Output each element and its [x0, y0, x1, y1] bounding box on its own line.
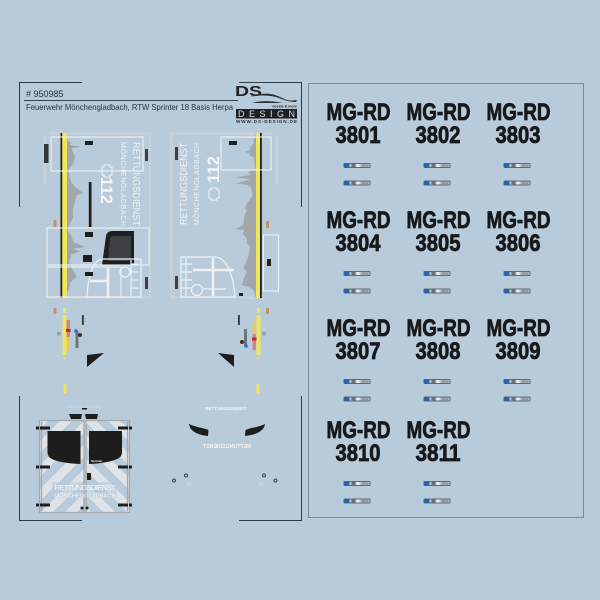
left body outline [45, 134, 150, 298]
left coat of arms [87, 259, 141, 297]
crop marks [20, 82, 302, 520]
rear doors decal [36, 405, 132, 512]
door frame [40, 420, 130, 512]
left black line [60, 133, 62, 298]
small rings [172, 474, 277, 486]
left headlight [189, 424, 208, 436]
right body outline [171, 134, 272, 298]
right side emergency number: 112 [204, 156, 223, 183]
left side emergency number: 112 [97, 177, 116, 204]
rear model badge: Sprinter [91, 459, 103, 463]
plate set 3804: 3804 [336, 230, 381, 257]
rear text: Rettungsdienst: RETTUNGSDIENST [54, 483, 116, 492]
logo url: WWW.DS-DESIGN.DE [236, 119, 297, 124]
plate set 3802: 3802 [416, 122, 460, 149]
plate set 3811: MG-RD [406, 417, 470, 444]
left orange marker [54, 220, 56, 227]
plate set 3807: 3807 [336, 338, 380, 365]
plate set 3808: 3808 [416, 338, 460, 365]
left door chevrons [40, 421, 84, 512]
text backing band [52, 482, 117, 498]
article number: # 950985 [26, 89, 64, 99]
plate set 3802: MG-RD [406, 99, 470, 126]
left black bar [82, 315, 84, 325]
right black bar [238, 315, 240, 325]
plate set 3806: 3806 [496, 230, 540, 257]
logo: DS Design [235, 83, 297, 124]
left decal frames [47, 137, 149, 297]
plate set 3804 [326, 207, 390, 294]
plate set 3801: 3801 [336, 122, 380, 149]
logo swoosh [250, 94, 297, 103]
left yellow stripe [62, 133, 67, 298]
right rear strip [275, 135, 278, 183]
right black triangle [218, 353, 234, 367]
rear roof marks: RETTUNG RETTUNG [67, 405, 102, 409]
front text: Rettungsdienst: RETTUNGSDIENST [205, 406, 247, 412]
right decal frames [221, 137, 278, 291]
plate set 3801: MG-RD [326, 99, 390, 126]
plate set 3806 [486, 207, 550, 294]
door handle [87, 473, 91, 480]
right skyline [235, 133, 256, 298]
plate set 3809: 3809 [496, 338, 540, 365]
logo DS letters: DS [235, 83, 262, 100]
left side text: Rettungsdienst: RETTUNGSDIENST [130, 142, 142, 227]
plate set 3805 [406, 207, 470, 294]
plate set 3811: 3811 [416, 440, 460, 467]
header rule [24, 100, 238, 101]
left side text: Mönchengladbach: MÖNCHENGLADBACH [119, 142, 127, 226]
right side text: Rettungsdienst: RETTUNGSDIENST [178, 143, 190, 225]
rear text: Mönchengladbach: MÖNCHENGLADBACH [54, 492, 116, 500]
right side text: Mönchengladbach: MÖNCHENGLADBACH [193, 143, 201, 225]
mirrored front text: RETTUNGSDIENST [202, 444, 251, 450]
right headlight [245, 424, 265, 436]
left side window [102, 231, 134, 265]
right orange marker [266, 221, 269, 228]
plate set 3805: 3805 [416, 230, 460, 257]
plate set 3807: MG-RD [326, 315, 390, 342]
right side star of life [209, 188, 219, 200]
left rear window [48, 431, 80, 464]
right loose small decals [218, 308, 269, 394]
plate set 3808: MG-RD [406, 315, 470, 342]
left small black marks [83, 141, 93, 276]
panel frame [308, 84, 584, 518]
right warning emblems [240, 321, 266, 350]
left yellow strip [62, 308, 66, 360]
right yellow stripe [256, 133, 260, 298]
left loose small decals [54, 308, 104, 394]
front decal set [172, 406, 277, 486]
right small black marks [229, 141, 271, 296]
plate set 3809 [486, 315, 550, 402]
plate set 3802 [406, 99, 470, 186]
left door handles [44, 144, 148, 289]
left side star of life [102, 165, 112, 177]
left yellow lens [64, 384, 66, 394]
plate set 3810 [326, 417, 390, 504]
right door handles [175, 147, 178, 289]
panel: number plates sheet [308, 84, 584, 518]
plate set 3803: 3803 [496, 122, 540, 149]
right coat of arms [181, 257, 235, 297]
right door chevrons [85, 421, 129, 512]
plate set 3803: MG-RD [486, 99, 550, 126]
plate set 3807 [326, 315, 390, 402]
right orange lamp [266, 308, 269, 314]
left vertical black trim [89, 182, 92, 227]
logo tagline: decals & more [272, 104, 297, 108]
plate set 3810: 3810 [336, 440, 380, 467]
left warning emblems [57, 320, 82, 349]
plate set 3805: MG-RD [406, 207, 470, 234]
left van side decal [43, 133, 150, 298]
rear lock dots [80, 506, 88, 510]
left black triangle [87, 353, 104, 367]
logo design bar: DESIGN [238, 109, 295, 119]
plate set 3804: MG-RD [326, 207, 390, 234]
right rear window [89, 431, 122, 464]
right yellow lens [256, 384, 260, 394]
left orange lamp [54, 308, 56, 314]
right black line [260, 133, 262, 298]
left rear strip [43, 135, 46, 183]
plate set 3803 [486, 99, 550, 186]
plate set 3810: MG-RD [326, 417, 390, 444]
right van side decal [171, 133, 278, 298]
plate set 3806: MG-RD [486, 207, 550, 234]
right yellow strip [256, 308, 260, 360]
door hinges [36, 426, 132, 506]
plate set 3811 [406, 417, 470, 504]
plate set 3808 [406, 315, 470, 402]
plate set 3809: MG-RD [486, 315, 550, 342]
left skyline [66, 133, 85, 295]
subtitle: Feuerwehr Mönchengladbach, RTW Sprinter 18 Basis Herpa [26, 102, 233, 112]
plate set 3801 [326, 99, 390, 186]
